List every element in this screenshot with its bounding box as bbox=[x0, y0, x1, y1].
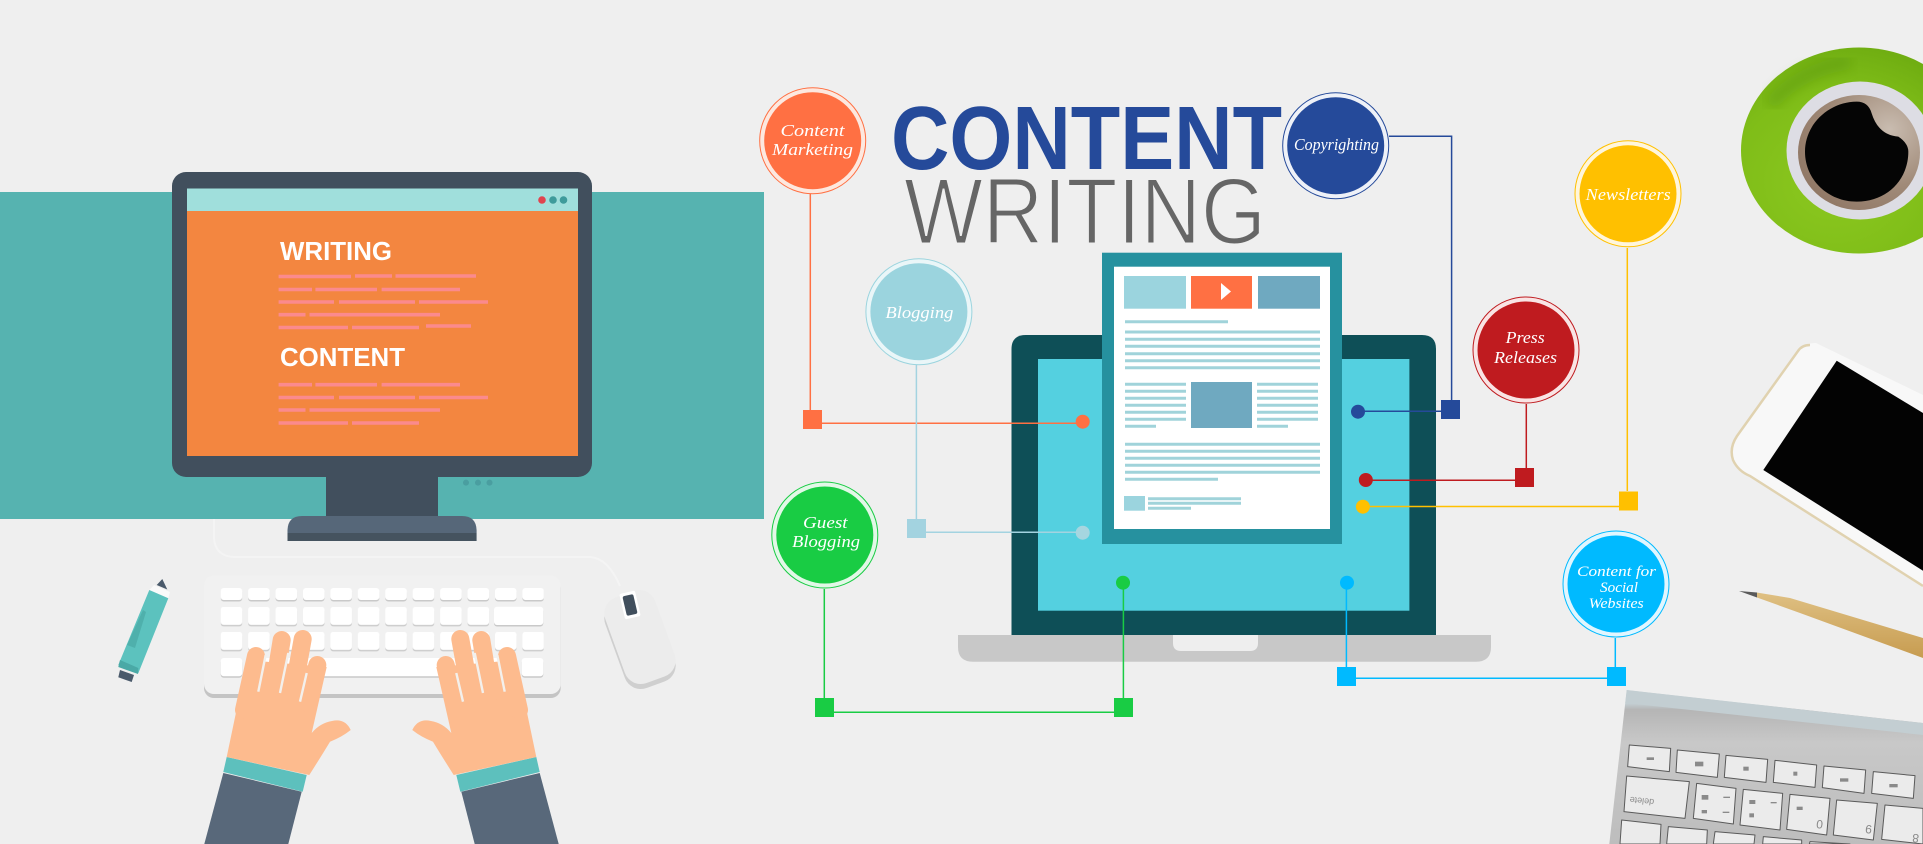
bubble: content marketing bbox=[760, 88, 866, 194]
window dots bbox=[538, 196, 567, 204]
bubble: guest blogging bbox=[772, 482, 878, 588]
key legends: 0 bbox=[1815, 817, 1824, 831]
key legends: 9 bbox=[1864, 822, 1873, 836]
desktop monitor bbox=[172, 172, 592, 541]
white keyboard bbox=[204, 576, 561, 698]
title: content: CONTENT bbox=[891, 89, 1282, 189]
bubble: blogging bbox=[866, 259, 972, 365]
cup rim bbox=[1786, 82, 1923, 220]
key symbols bbox=[1647, 757, 1898, 817]
monitor base bbox=[288, 516, 477, 541]
bubble: newsletters: Newsletters bbox=[1585, 185, 1671, 204]
bubble: blogging: Blogging bbox=[885, 303, 953, 322]
monitor stand bbox=[326, 470, 438, 520]
connector: guest blogging bbox=[815, 576, 1133, 717]
smartphone bbox=[1731, 343, 1923, 586]
bubble: guest blogging: Guest bbox=[803, 513, 849, 532]
bubble: content marketing: Marketing bbox=[771, 140, 853, 159]
teal band bbox=[0, 192, 764, 519]
document text lines bbox=[1125, 322, 1320, 508]
bubble: content for social websites: Websites bbox=[1589, 596, 1644, 612]
connector: newsletters bbox=[1356, 248, 1638, 514]
screen bbox=[187, 211, 578, 456]
laptop frame bbox=[1012, 335, 1436, 635]
media tiles bbox=[1124, 276, 1320, 309]
document thumbnail bbox=[1124, 496, 1145, 511]
content text lines bbox=[279, 385, 488, 423]
document bbox=[1102, 253, 1342, 544]
laptop notch bbox=[1173, 635, 1258, 651]
mouse bbox=[600, 585, 680, 694]
mouse cable bbox=[214, 519, 620, 586]
bubble: copyrighting bbox=[1283, 93, 1389, 199]
bubble: newsletters bbox=[1575, 141, 1681, 247]
bubble: press releases bbox=[1473, 297, 1579, 403]
silver keyboard bbox=[1605, 688, 1923, 844]
screen heading: writing: WRITING bbox=[280, 236, 392, 266]
connector: content marketing bbox=[803, 194, 1090, 429]
document image bbox=[1191, 382, 1252, 428]
bubble: content for social websites: Content for bbox=[1577, 564, 1656, 580]
laptop base bbox=[958, 635, 1491, 662]
key legends bbox=[1629, 795, 1920, 844]
coffee bbox=[1805, 102, 1908, 202]
bubble: copyrighting: Copyrighting bbox=[1294, 135, 1379, 154]
laptop screen bbox=[1038, 359, 1409, 611]
title bbox=[891, 89, 1282, 264]
screen heading: content: CONTENT bbox=[280, 342, 405, 372]
laptop bbox=[958, 335, 1491, 662]
bubble: press releases: Press bbox=[1505, 328, 1545, 347]
pencil bbox=[1739, 591, 1923, 658]
bubble: content for social websites bbox=[1563, 531, 1669, 637]
title: writing: WRITING bbox=[904, 158, 1266, 264]
keyboard keys bbox=[1620, 745, 1923, 844]
coffee crema bbox=[1798, 95, 1920, 210]
bubble: content for social websites: Social bbox=[1600, 580, 1638, 596]
bubble: content marketing: Content bbox=[780, 121, 846, 140]
saucer bbox=[1741, 48, 1923, 254]
monitor frame bbox=[172, 172, 592, 477]
connector: press releases bbox=[1359, 404, 1534, 487]
connector: social websites bbox=[1337, 576, 1626, 686]
coffee cup on saucer bbox=[1741, 48, 1923, 254]
small band dots bbox=[463, 480, 492, 486]
connector: copyrighting bbox=[1351, 136, 1460, 419]
bubble: press releases: Releases bbox=[1493, 348, 1557, 367]
pen bbox=[118, 579, 170, 682]
connector: blogging bbox=[907, 365, 1090, 540]
browser bar bbox=[187, 188, 578, 211]
key legends: delete bbox=[1629, 795, 1655, 807]
bubble: guest blogging: Blogging bbox=[792, 532, 860, 551]
right hand bbox=[412, 639, 559, 844]
left hand bbox=[204, 639, 351, 844]
writing text lines bbox=[279, 276, 488, 328]
